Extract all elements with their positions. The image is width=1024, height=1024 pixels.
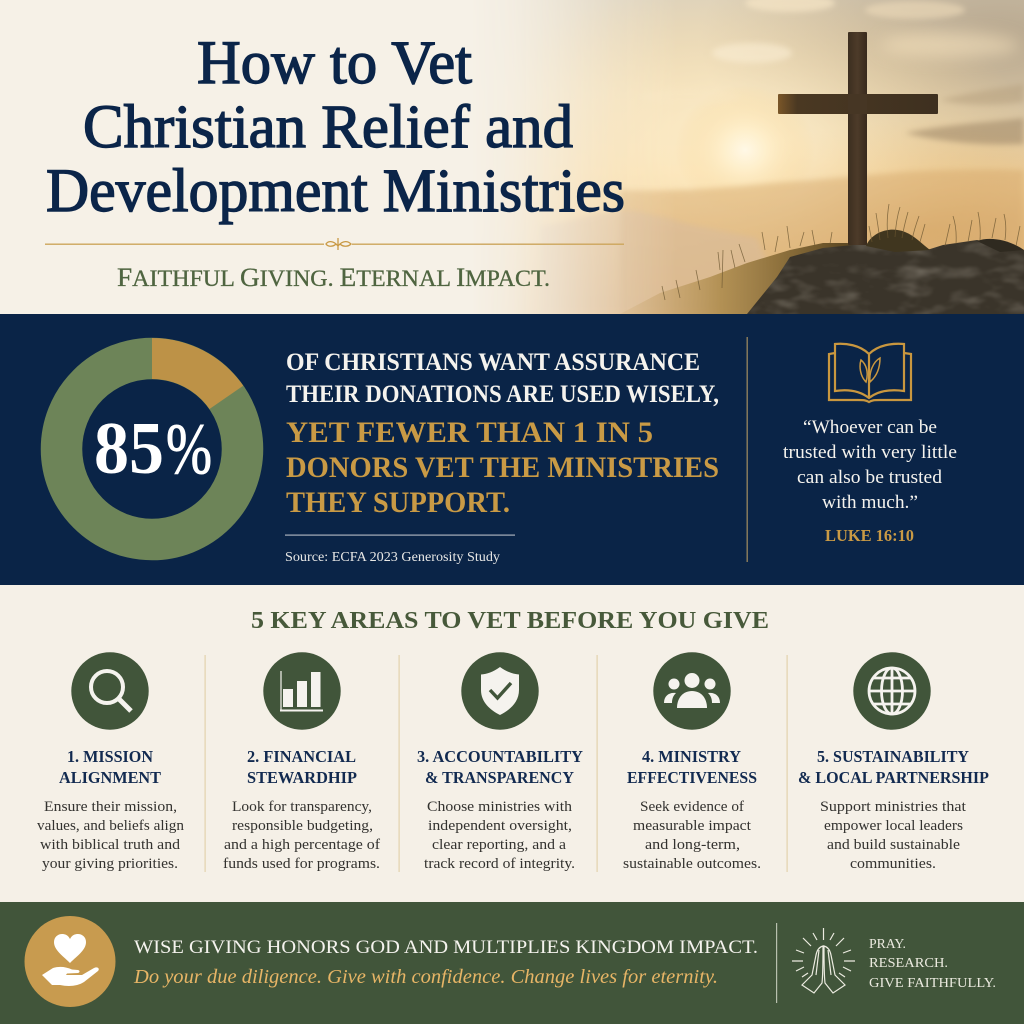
call to action list: GIVE FAITHFULLY. <box>869 975 996 990</box>
icon: bar chart <box>263 652 341 730</box>
description: communities. <box>850 856 936 872</box>
scripture quote: can also be trusted <box>797 468 943 488</box>
panel: 5 sustainability and local partnership <box>798 652 989 872</box>
heading: 5. SUSTAINABILITY <box>817 747 969 766</box>
panel: closing call to action band <box>0 902 1024 1024</box>
description: values, and beliefs align <box>37 818 184 834</box>
statistic text: YET FEWER THAN 1 IN 5 <box>286 416 653 449</box>
heading <box>798 747 989 787</box>
heading <box>627 747 757 787</box>
description: Seek evidence of <box>640 799 744 815</box>
icon: heart in open hand <box>24 916 116 1007</box>
closing message: Do your due diligence. Give with confidence. Change lives for eternity. <box>133 966 718 988</box>
scripture quote: with much.” <box>822 493 918 513</box>
title <box>46 30 625 225</box>
call to action list: RESEARCH. <box>869 955 948 970</box>
heading: STEWARDHIP <box>247 768 357 787</box>
description <box>37 799 184 872</box>
description: measurable impact <box>633 818 752 834</box>
title: Development Ministries <box>46 158 625 225</box>
panel: 1 mission alignment <box>37 652 184 872</box>
panel: 3 accountability and transparency <box>417 652 583 872</box>
closing message: WISE GIVING HONORS GOD AND MULTIPLIES KINGDOM IMPACT. <box>134 937 758 958</box>
heading: & LOCAL PARTNERSHIP <box>798 768 989 787</box>
scripture quote <box>783 418 957 513</box>
source note: Source: ECFA 2023 Generosity Study <box>285 550 500 565</box>
icon: praying hands <box>792 928 855 993</box>
icon: wooden cross <box>778 32 938 245</box>
heading: 3. ACCOUNTABILITY <box>417 747 583 766</box>
description: responsible budgeting, <box>232 818 373 834</box>
scripture reference: LUKE 16:10 <box>825 526 914 545</box>
tagline: FAITHFUL GIVING. ETERNAL IMPACT. <box>117 263 550 292</box>
description: sustainable outcomes. <box>623 856 761 872</box>
title: Christian Relief and <box>83 94 573 161</box>
description <box>223 799 380 872</box>
heading <box>59 747 161 787</box>
heading: ALIGNMENT <box>59 768 161 787</box>
closing message <box>133 937 758 988</box>
heading: 4. MINISTRY <box>642 747 741 766</box>
statistic text: THEY SUPPORT. <box>286 486 510 519</box>
title: How to Vet <box>197 30 472 97</box>
donut chart: 85 percent: 85 <box>94 408 164 490</box>
donut chart: 85 percent: % <box>166 409 212 489</box>
statistic text <box>286 349 719 519</box>
scripture quote: “Whoever can be <box>803 418 937 438</box>
call to action list: PRAY. <box>869 936 906 951</box>
description <box>424 799 575 872</box>
description: and a high percentage of <box>224 837 380 853</box>
description: Choose ministries with <box>427 799 573 815</box>
statistic text: DONORS VET THE MINISTRIES <box>286 451 719 484</box>
icon: shield with check <box>461 652 539 730</box>
section heading: 5 KEY AREAS TO VET BEFORE YOU GIVE <box>251 607 769 634</box>
description: and long-term, <box>645 837 740 853</box>
description: track record of integrity. <box>424 856 575 872</box>
donut chart: 85 percent <box>62 338 243 540</box>
hero photo: cross on a hilltop at sunrise <box>502 0 1024 314</box>
heading: EFFECTIVENESS <box>627 768 757 787</box>
heading <box>247 747 357 787</box>
icon: group of people <box>653 652 731 730</box>
call to action list <box>869 936 996 990</box>
statistic text: OF CHRISTIANS WANT ASSURANCE <box>286 349 700 376</box>
description: clear reporting, and a <box>432 837 566 853</box>
description: with biblical truth and <box>40 837 181 853</box>
heading: 2. FINANCIAL <box>247 747 356 766</box>
statistic text: THEIR DONATIONS ARE USED WISELY, <box>286 381 719 408</box>
description: independent oversight, <box>428 818 572 834</box>
icon: magnifying glass <box>71 652 149 730</box>
scripture quote: trusted with very little <box>783 443 957 463</box>
description: funds used for programs. <box>223 856 380 872</box>
description: and build sustainable <box>827 837 960 853</box>
icon: open book <box>829 344 911 402</box>
heading <box>417 747 583 787</box>
description: Ensure their mission, <box>44 799 177 815</box>
description <box>623 799 761 872</box>
icon: globe <box>853 652 931 730</box>
description: Support ministries that <box>820 799 967 815</box>
description: your giving priorities. <box>42 856 178 872</box>
ornamental title divider <box>45 238 624 250</box>
panel: statistic band <box>0 314 1024 585</box>
description: Look for transparency, <box>232 799 372 815</box>
heading: 1. MISSION <box>67 747 153 766</box>
panel: 4 ministry effectiveness <box>623 652 761 872</box>
panel: 2 financial stewardship <box>223 652 380 872</box>
icon: hill with grass and rock <box>620 204 1024 316</box>
description <box>820 799 967 872</box>
heading: & TRANSPARENCY <box>425 768 574 787</box>
description: empower local leaders <box>824 818 963 834</box>
